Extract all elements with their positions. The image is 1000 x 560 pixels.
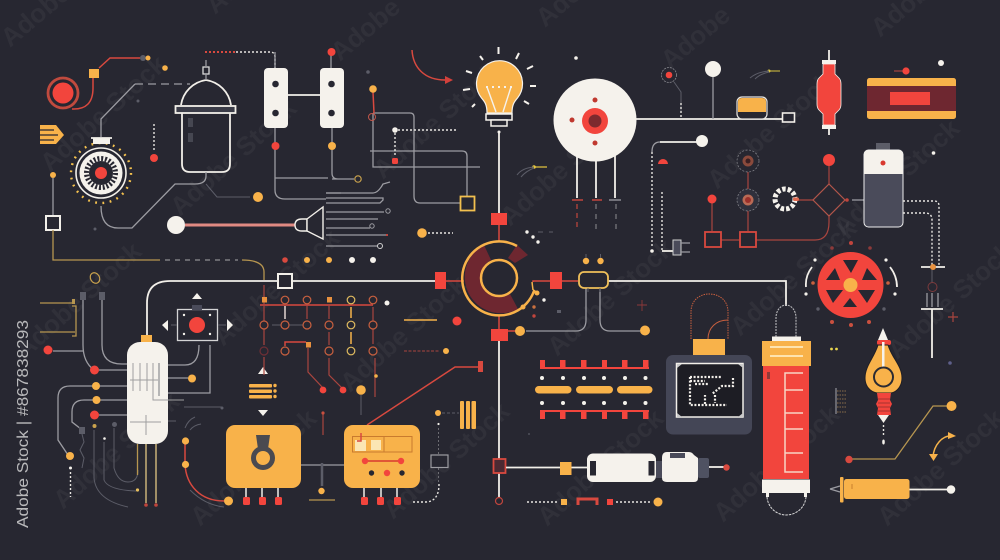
watermarks: Adobe Stock — [334, 268, 473, 397]
wires: central left schematic — [282, 56, 578, 263]
icon: yellow stack with triangles — [249, 367, 277, 416]
icon: speaker funnel with rod — [167, 150, 390, 248]
watermarks: Adobe Stock — [367, 55, 506, 184]
top right: target, pin and cap on rail — [662, 61, 794, 122]
icon: white disc — [554, 78, 782, 232]
watermarks: Adobe Stock — [34, 48, 173, 177]
icon: banded box — [867, 60, 956, 119]
watermarks: Adobe Stock — [207, 222, 346, 351]
wire with yellow dot and arrow — [845, 401, 956, 463]
watermarks: Adobe Stock — [164, 92, 303, 221]
red curved arrow — [412, 50, 453, 84]
circle node grid — [260, 285, 462, 415]
left square terminal and long wire — [46, 172, 264, 285]
watermarks: Adobe Stock — [377, 395, 516, 524]
watermarks: Adobe Stock — [494, 102, 633, 231]
icon: yellow comb arrow — [40, 125, 64, 144]
icon: red pin with dotted stem — [150, 124, 158, 162]
stock id text: Adobe Stock | #867838293 — [15, 320, 32, 528]
watermarks: Adobe Stock — [531, 402, 670, 531]
icon: triple bars and dotted lead — [412, 401, 530, 504]
red circuit: targets, squares, diamond — [705, 150, 864, 247]
icon: pen nib drop — [865, 328, 902, 444]
watermarks: Adobe Stock — [707, 398, 846, 527]
watermarks: Adobe Stock — [541, 232, 680, 361]
watermarks: Adobe Stock — [701, 65, 840, 194]
icon: red capsule — [817, 50, 841, 135]
icon: lightbulb — [463, 47, 536, 134]
junction wires to yellow dots — [508, 254, 650, 336]
icon: white terminal plates — [264, 48, 344, 199]
icon: yellow keyhole module — [182, 411, 345, 507]
watermarks: Adobe — [655, 0, 736, 75]
main bus wire — [147, 132, 786, 497]
icon: yellow control module — [344, 361, 483, 505]
icon: gear — [71, 84, 135, 203]
right dotted wire set with plug — [650, 135, 708, 255]
watermarks: Adobe Stock — [724, 212, 863, 341]
icon: syringe — [830, 477, 955, 502]
icon: red target with wire — [48, 55, 168, 109]
watermarks: Adobe Stock — [9, 235, 148, 364]
icon: antenna below battery — [921, 270, 958, 365]
watermarks: Adobe Stock — [184, 402, 323, 531]
bottom dotted row — [527, 498, 662, 506]
bottom capsule train — [494, 452, 730, 482]
watermarks: Adobe Stock — [47, 385, 186, 514]
icon: red wheel — [804, 241, 897, 327]
icon: monitor with padlock arch — [666, 294, 752, 434]
icon: flask — [94, 52, 275, 230]
watermarks: Adobe Stock — [827, 112, 966, 241]
icon: central ring gauge — [462, 241, 561, 318]
red and yellow comb array — [535, 360, 652, 419]
icon: battery — [864, 143, 945, 270]
comb ticks and dots — [830, 348, 847, 414]
icon: control box — [162, 293, 233, 340]
icon: white tube with leads — [40, 292, 224, 507]
icon: small meteor — [517, 165, 547, 177]
icon: red scale tube — [762, 305, 811, 515]
